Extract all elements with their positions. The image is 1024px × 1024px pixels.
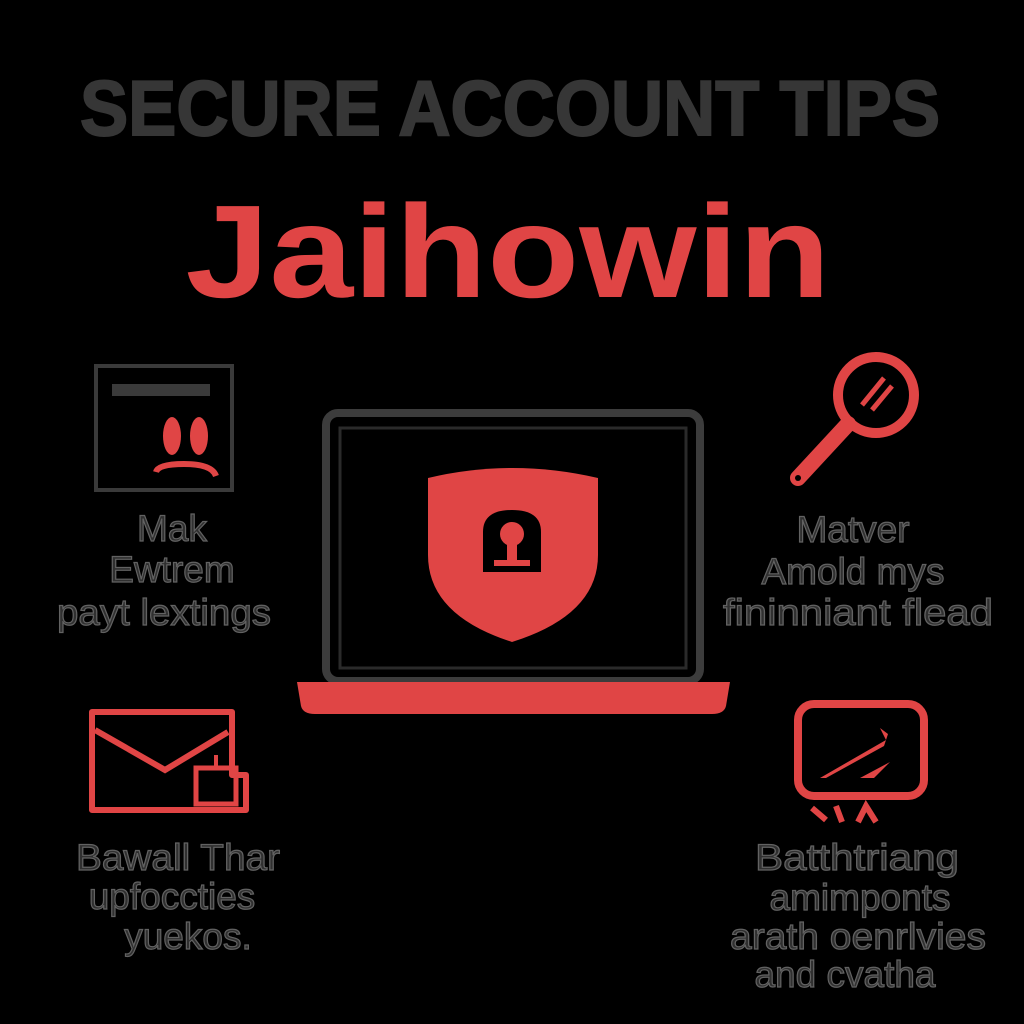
text: right bottom <box>730 837 986 995</box>
text: left top <box>57 508 271 633</box>
text: left top: Mak <box>137 508 207 549</box>
text: right bottom: arath oenrlvies <box>730 916 986 957</box>
icon: envelope <box>92 712 246 810</box>
text: left bottom: yuekos. <box>124 916 252 957</box>
text: right bottom: amimponts <box>770 877 950 918</box>
icon: magnifier <box>798 357 914 478</box>
text: right top: Amold mys <box>762 551 944 592</box>
text: left bottom: upfoccties <box>89 876 255 917</box>
laptop with shield <box>297 413 730 714</box>
text: right bottom: Batthtriang <box>755 837 959 878</box>
icon: monitor with plane <box>798 704 924 822</box>
text: right top <box>723 509 993 633</box>
text: left bottom: Bawall Thar <box>76 837 280 878</box>
text: right top: fininniant flead <box>723 592 993 633</box>
icon: browser window sad face <box>96 366 232 490</box>
text: right top: Matver <box>796 509 910 550</box>
text: left bottom <box>76 837 280 957</box>
text: left top: payt lextings <box>57 592 271 633</box>
title: SECURE ACCOUNT TIPS <box>80 64 940 152</box>
text: right bottom: and cvatha <box>754 954 936 995</box>
text: left top: Ewtrem <box>109 549 235 590</box>
brand heading: Jaihowin <box>186 178 830 325</box>
